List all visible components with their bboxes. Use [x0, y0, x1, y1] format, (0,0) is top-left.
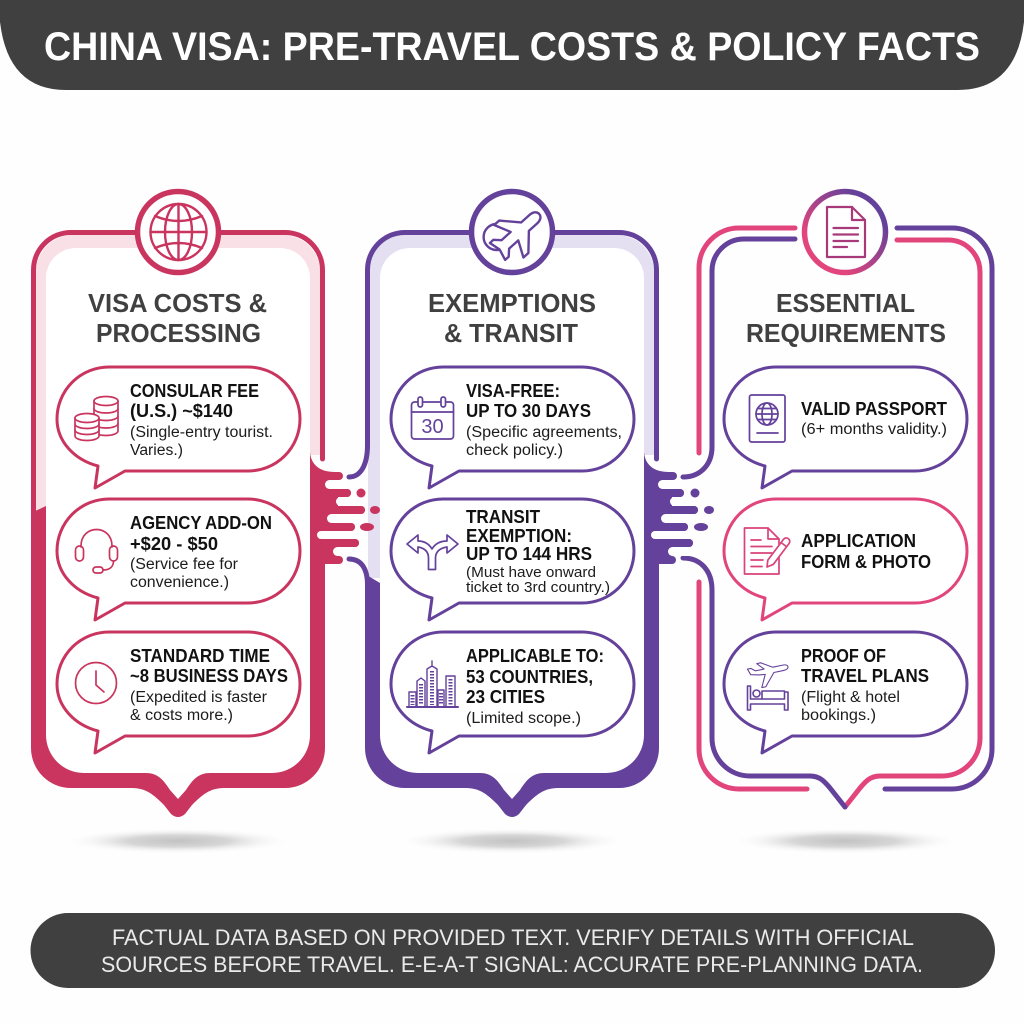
text: applicable to: (Limited scope.) [466, 710, 581, 727]
text: applicable to: APPLICABLE TO: [466, 646, 604, 666]
text: valid passport [801, 399, 947, 438]
text: proof of travel plans: TRAVEL PLANS [801, 666, 929, 686]
icon: calendar: 30 [421, 416, 444, 438]
connector: purple streaks between panel 2 and 3 [646, 472, 714, 564]
text: standard time: (Expedited is faster [130, 689, 267, 706]
heading [88, 288, 267, 348]
text: agency add-on: convenience.) [130, 574, 229, 591]
callout: valid passport [724, 367, 967, 488]
text: transit exemption: (Must have onward [466, 565, 596, 581]
footer note: SOURCES BEFORE TRAVEL. E-E-A-T SIGNAL: ACCURATE PRE-PLANNING DATA. [101, 952, 923, 977]
text: applicable to: 53 COUNTRIES, [466, 667, 593, 687]
heading [428, 288, 596, 348]
text: visa-free: (Specific agreements, [466, 424, 622, 441]
text: transit exemption: EXEMPTION: [466, 526, 572, 546]
text: transit exemption: ticket to 3rd country.) [466, 580, 610, 596]
text: visa-free: UP TO 30 DAYS [466, 401, 591, 421]
callout: transit exemption [391, 499, 634, 620]
footer note: FACTUAL DATA BASED ON PROVIDED TEXT. VERIFY DETAILS WITH OFFICIAL [112, 925, 914, 950]
text: standard time [130, 646, 288, 724]
text: transit exemption [466, 507, 610, 596]
text: consular fee: Varies.) [130, 442, 183, 459]
icon: fork arrows [407, 535, 458, 570]
text: valid passport: VALID PASSPORT [801, 399, 947, 419]
text: applicable to [466, 646, 604, 727]
text: consular fee [130, 381, 273, 459]
callout: standard time [57, 632, 300, 753]
connector: crimson streaks between panel 1 and 2 [312, 472, 380, 564]
icon: plane and bed [747, 657, 791, 710]
callout: applicable to [391, 632, 634, 753]
text: application: APPLICATION [801, 531, 916, 551]
text: application [801, 531, 931, 572]
heading: REQUIREMENTS [746, 318, 946, 348]
text: proof of travel plans: PROOF OF [801, 646, 886, 666]
heading [746, 288, 946, 348]
panel: essential requirements [683, 192, 992, 807]
text: agency add-on: AGENCY ADD-ON [130, 513, 272, 533]
callout: consular fee [57, 367, 300, 488]
icon: headset [76, 530, 118, 573]
text: consular fee: (Single-entry tourist. [130, 424, 273, 441]
text: application: FORM & PHOTO [801, 552, 931, 572]
ground shadows [63, 828, 960, 854]
panel: visa costs and processing [31, 192, 338, 817]
icon: form and pencil [744, 528, 791, 574]
footer note [30, 913, 995, 988]
icon: passport [750, 395, 785, 442]
callout: application form and photo [724, 499, 967, 620]
text: agency add-on: (Service fee for [130, 556, 238, 573]
text: valid passport: (6+ months validity.) [801, 421, 947, 438]
icon: document badge [804, 192, 886, 272]
text: standard time: ~8 BUSINESS DAYS [130, 666, 288, 686]
callout: agency add-on [57, 499, 300, 620]
heading: PROCESSING [96, 318, 261, 348]
heading: EXEMPTIONS [428, 288, 596, 318]
text: agency add-on [130, 513, 272, 591]
text: standard time: STANDARD TIME [130, 646, 270, 666]
text: consular fee: (U.S.) ~$140 [130, 401, 233, 421]
text: consular fee: CONSULAR FEE [130, 381, 259, 401]
callout: proof of travel plans [724, 632, 967, 753]
text: proof of travel plans [801, 646, 929, 724]
heading: ESSENTIAL [776, 288, 915, 318]
text: visa-free [466, 381, 622, 459]
text: transit exemption: TRANSIT [466, 507, 540, 527]
text: applicable to: 23 CITIES [466, 687, 545, 707]
text: standard time: & costs more.) [130, 707, 233, 724]
icon: clock [76, 662, 116, 704]
title banner: CHINA VISA: PRE-TRAVEL COSTS & POLICY FACTS [44, 25, 980, 69]
icon: coins [75, 396, 118, 441]
icon: globe badge [138, 192, 218, 272]
callout: visa-free [391, 367, 634, 488]
text: proof of travel plans: (Flight & hotel [801, 689, 900, 706]
text: agency add-on: +$20 - $50 [130, 534, 218, 554]
icon: city skyline [407, 661, 458, 707]
text: proof of travel plans: bookings.) [801, 707, 876, 724]
text: visa-free: VISA-FREE: [466, 381, 560, 401]
icon: calendar [412, 397, 454, 439]
title banner [0, 0, 1024, 90]
icon: airplane badge [472, 192, 554, 272]
heading: & TRANSIT [444, 318, 578, 348]
heading: VISA COSTS & [88, 288, 267, 318]
panel: exemptions and transit [349, 192, 672, 817]
text: transit exemption: UP TO 144 HRS [466, 544, 592, 564]
text: visa-free: check policy.) [466, 442, 563, 459]
